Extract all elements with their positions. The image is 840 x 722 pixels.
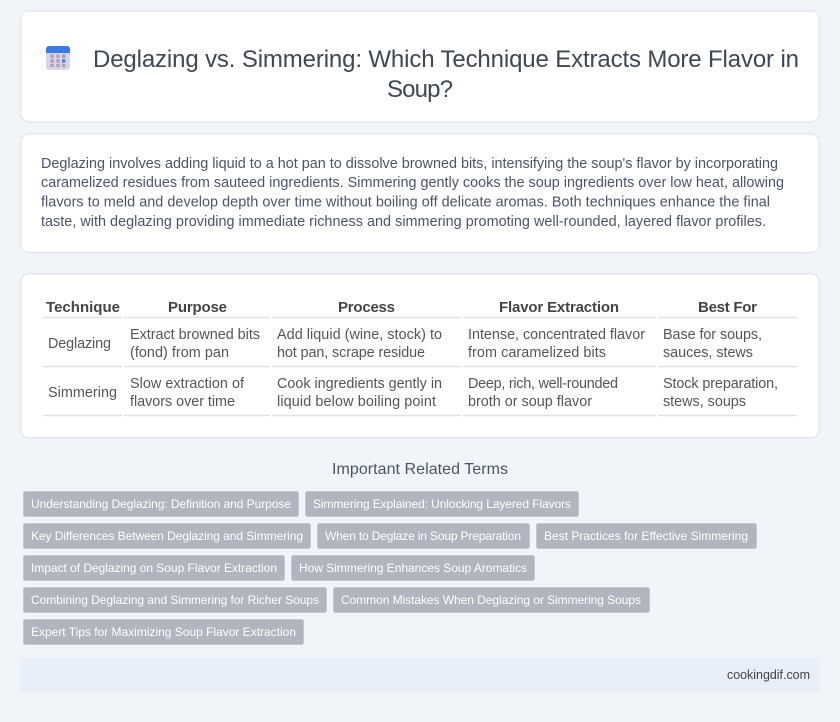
footer: cookingdif.com — [727, 668, 810, 682]
footer — [20, 658, 820, 692]
title: Deglazing vs. Simmering: Which Technique Extracts More Flavor in — [93, 46, 799, 73]
title — [93, 46, 799, 103]
text block: introduction paragraph — [41, 156, 784, 230]
icon: calendar grid — [46, 46, 70, 70]
tag: Best Practices for Effective Simmering — [544, 529, 748, 543]
table row: Deglazing: Base for soups, — [663, 327, 762, 343]
table row: Deglazing: from caramelized bits — [468, 345, 606, 361]
tag list — [24, 492, 756, 644]
tag — [24, 588, 326, 612]
table header row: Technique — [46, 299, 120, 316]
heading: important related terms: Important Related Terms — [332, 461, 508, 478]
tag: When to Deglaze in Soup Preparation — [325, 529, 521, 543]
tag: Key Differences Between Deglazing and Simmering — [31, 529, 303, 543]
table row: Simmering: Stock preparation, — [663, 376, 778, 392]
panel: introduction — [21, 134, 819, 253]
table row: Simmering: Slow extraction of — [130, 376, 245, 392]
tag: Common Mistakes When Deglazing or Simmering Soups — [341, 593, 641, 607]
tag: Expert Tips for Maximizing Soup Flavor Extraction — [31, 625, 296, 639]
table header row: Flavor Extraction — [499, 299, 619, 316]
tag — [24, 524, 310, 548]
panel: header — [21, 11, 819, 122]
table row: Deglazing: (fond) from pan — [130, 345, 229, 361]
tag: How Simmering Enhances Soup Aromatics — [299, 561, 527, 575]
text block: introduction paragraph: caramelized residues from sauteed ingredients. Simmering gently cooks the soup ingredients over low heat, allowing — [41, 175, 784, 191]
table row: Simmering: Deep, rich, well-rounded — [468, 376, 618, 392]
tag — [334, 588, 650, 612]
tag — [24, 492, 298, 516]
text block: introduction paragraph: taste, with deglazing providing immediate richness and simmering promoting well-rounded, layered flavor profiles. — [41, 214, 766, 230]
table row: Simmering: Cook ingredients gently in — [277, 376, 442, 392]
table row: Deglazing: Add liquid (wine, stock) to — [277, 327, 442, 343]
tag: Combining Deglazing and Simmering for Richer Soups — [31, 593, 319, 607]
tag — [536, 524, 756, 548]
table row: Deglazing: Intense, concentrated flavor — [468, 327, 645, 343]
text block: introduction paragraph: Deglazing involves adding liquid to a hot pan to dissolve browned bits, intensifying the soup's flavor by incorporating — [41, 156, 778, 172]
tag — [292, 556, 534, 580]
table row: Deglazing: Extract browned bits — [130, 327, 260, 343]
table row: Deglazing: sauces, stews — [663, 345, 753, 361]
table row: Deglazing: hot pan, scrape residue — [277, 345, 425, 361]
table row: Simmering — [48, 376, 778, 410]
table row: Simmering: flavors over time — [130, 394, 235, 410]
table row: Simmering: liquid below boiling point — [277, 394, 436, 410]
tag — [318, 524, 530, 548]
text block: introduction paragraph: flavors to meld and develop depth over time without boiling off delicate aromas. Both techniques enhance the final — [41, 194, 770, 210]
panel: comparison table — [21, 274, 819, 438]
table row: Deglazing — [48, 327, 762, 361]
table header row — [46, 299, 757, 316]
table row: Deglazing: Deglazing — [48, 336, 111, 352]
tag: Simmering Explained: Unlocking Layered Flavors — [313, 497, 571, 511]
tag — [24, 556, 284, 580]
table header row: Process — [338, 299, 395, 316]
tag: Impact of Deglazing on Soup Flavor Extraction — [31, 561, 277, 575]
table header row: Purpose — [168, 299, 227, 316]
tag — [24, 620, 304, 644]
table row: Simmering: stews, soups — [663, 394, 746, 410]
table row: Simmering: broth or soup flavor — [468, 394, 592, 410]
table header row: Best For — [698, 299, 757, 316]
title: Soup? — [387, 76, 453, 103]
tag: Understanding Deglazing: Definition and Purpose — [31, 497, 291, 511]
tag — [306, 492, 578, 516]
table row: Simmering: Simmering — [48, 385, 117, 401]
